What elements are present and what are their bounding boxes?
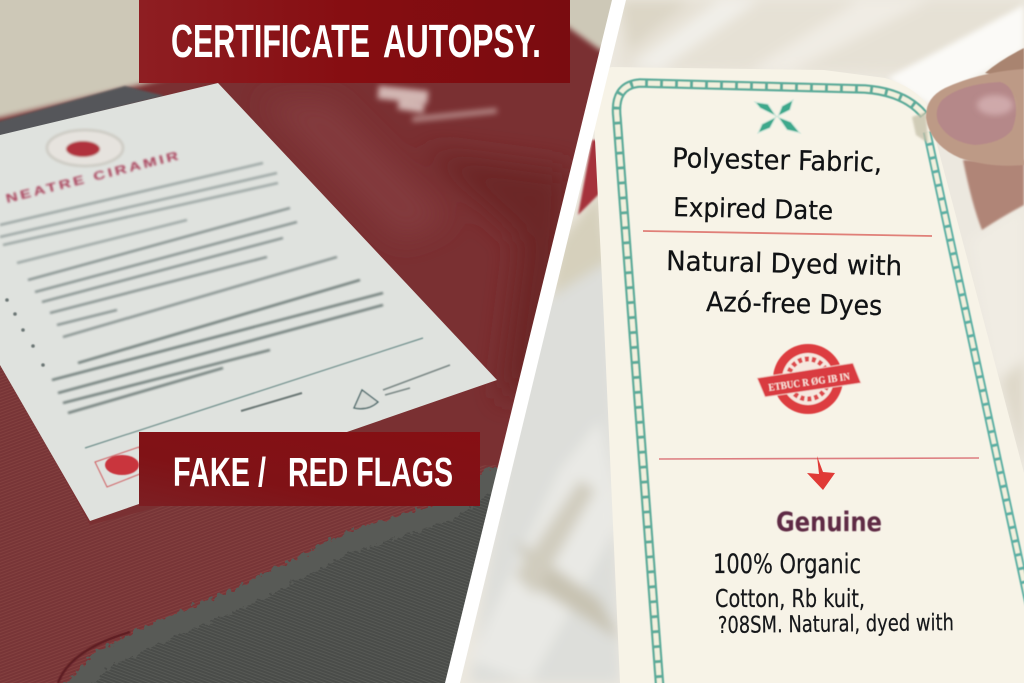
bullets [5,298,45,367]
document heading: NEATRE CIRAMIR [4,148,182,206]
line: 100% organic: 100% Organic [713,549,861,580]
banner title: AUTOPSY. [383,15,541,67]
panel: fake certificate photo [0,0,640,683]
dark strip under document [0,86,165,138]
banner title: CERTIFICATE [171,15,370,67]
white diagonal divider [445,0,626,683]
frayed grey edge [74,478,492,683]
grey fabric [91,493,492,683]
red fabric crease [58,632,130,683]
line: azo-free dyes: Azó-free Dyes [706,287,882,322]
stamp [757,344,861,414]
panel: genuine label photo [440,0,1024,683]
line: expired date: Expired Date [673,193,833,227]
line: gsm and dye: ?08SM. Natural, dyed with [718,610,954,639]
document sheet [0,83,497,521]
thumb [926,48,1024,166]
backdrop: beige surface [0,0,640,118]
red shirt glimpse [578,140,601,215]
white fold above thumb [888,5,1024,105]
line: polyester fabric: Polyester Fabric, [672,143,882,179]
red divider top [643,231,932,236]
stamp: ETBUC R ØG IB IN [768,372,851,394]
red shirt fabric [292,107,566,390]
seal [47,130,123,166]
red stamp [94,446,139,488]
line: cotton rib knit: Cotton, Rb kuit, [715,584,865,613]
line: natural dyed with: Natural Dyed with [666,246,902,282]
thumb shadow on label [912,112,928,143]
red divider dashed [659,458,979,459]
red arrow [807,456,835,490]
banner caption [173,449,453,495]
woven red fabric [0,360,500,683]
footer rule and signature [85,338,450,448]
banner: fake red flags [139,432,480,506]
icon: green leaf cross [755,100,800,133]
shirt print [377,86,497,122]
label card [590,60,1024,683]
heading: genuine: Genuine [776,507,882,538]
banner: certificate autopsy [139,0,570,83]
banner caption: RED FLAGS [288,449,453,495]
lower finger [963,160,1024,230]
white fabric folds [470,0,1024,683]
banner caption: FAKE / [173,449,266,495]
text: genuine details [713,549,954,639]
text: fake label lines [666,143,902,322]
teal ladder border [616,83,1024,683]
document body lines [0,163,278,263]
fingers [926,48,1024,230]
